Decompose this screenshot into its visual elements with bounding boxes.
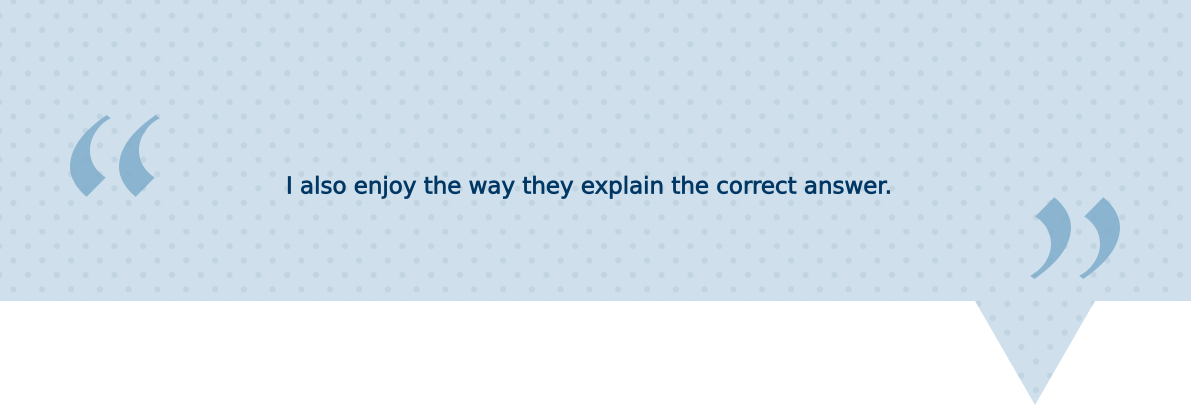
icon: opening quotation marks [70,115,160,197]
icon: closing quotation marks [1030,197,1120,279]
quote text: I also enjoy the way they explain the correct answer. [286,174,892,200]
